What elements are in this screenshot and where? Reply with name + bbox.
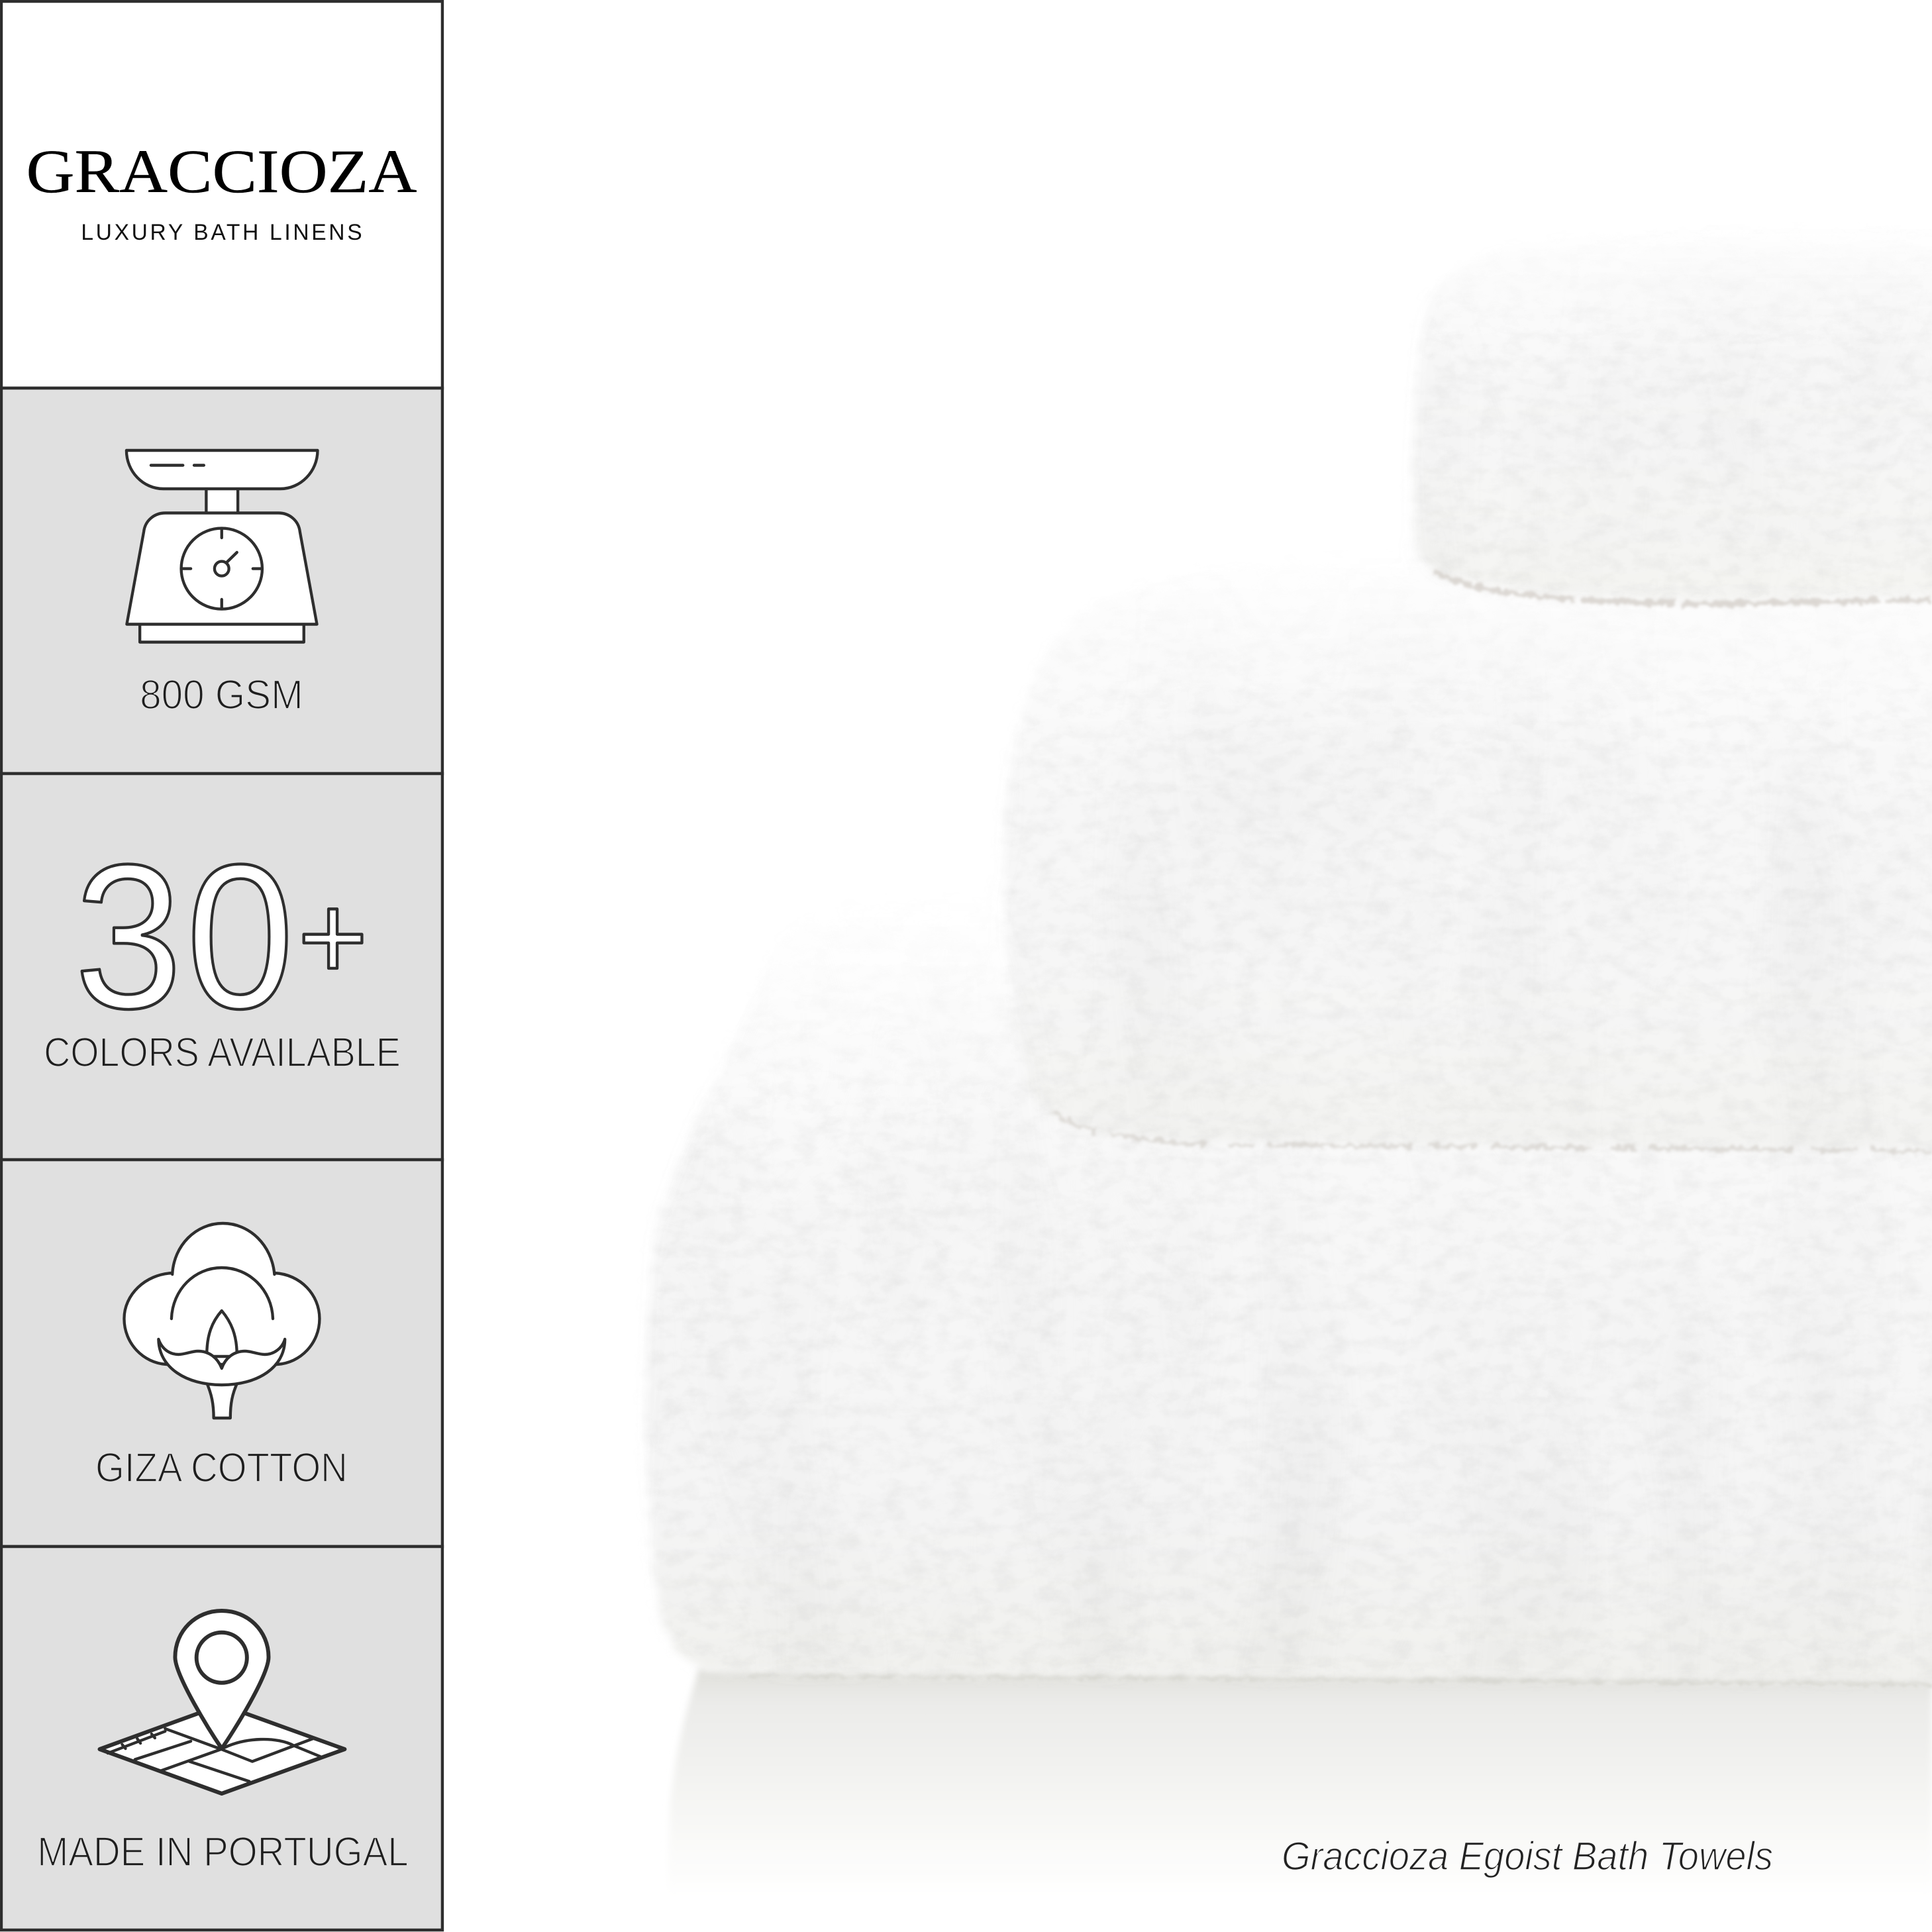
- icon: cotton boll: [124, 1223, 319, 1418]
- small towel: [1413, 222, 1932, 601]
- sidebar: [1, 1, 442, 1930]
- brand name: GRACCIOZA: [26, 137, 417, 205]
- label: Giza cotton: GIZA COTTON: [95, 1445, 348, 1491]
- icon: kitchen scale: [127, 450, 317, 642]
- panel: Giza cotton: [1, 1160, 442, 1547]
- large towel fringe shadow: [748, 1676, 1932, 1684]
- number: 30+: 3: [74, 822, 182, 1051]
- soft towel mottling: [629, 199, 1932, 1696]
- label: made in Portugal: MADE IN PORTUGAL: [37, 1829, 409, 1875]
- panel: brand: [1, 1, 442, 388]
- large towel: [647, 888, 1932, 1682]
- caption: Graccioza Egoist Bath Towels: [1282, 1834, 1773, 1878]
- medium towel seam: [1053, 1113, 1932, 1151]
- photo: stacked white bath towels: [645, 275, 1932, 1831]
- number: 30+: 0: [186, 822, 294, 1051]
- medium towel: [1003, 530, 1932, 1149]
- terry texture: [654, 380, 1932, 1661]
- label: colors available: COLORS AVAILABLE: [44, 1030, 401, 1076]
- small towel seam: [1434, 571, 1932, 604]
- tagline: LUXURY BATH LINENS: [81, 220, 362, 245]
- label: 800 GSM: 800 GSM: [140, 672, 303, 718]
- towel reflection on floor: [666, 1669, 1932, 1932]
- panel: made in Portugal: [1, 1547, 442, 1930]
- panel: 800 GSM: [1, 388, 442, 774]
- icon: map pin on map: [99, 1611, 344, 1794]
- panel: colors: [1, 774, 442, 1160]
- number: 30+: [74, 822, 368, 1051]
- number: 30+: +: [298, 869, 368, 1005]
